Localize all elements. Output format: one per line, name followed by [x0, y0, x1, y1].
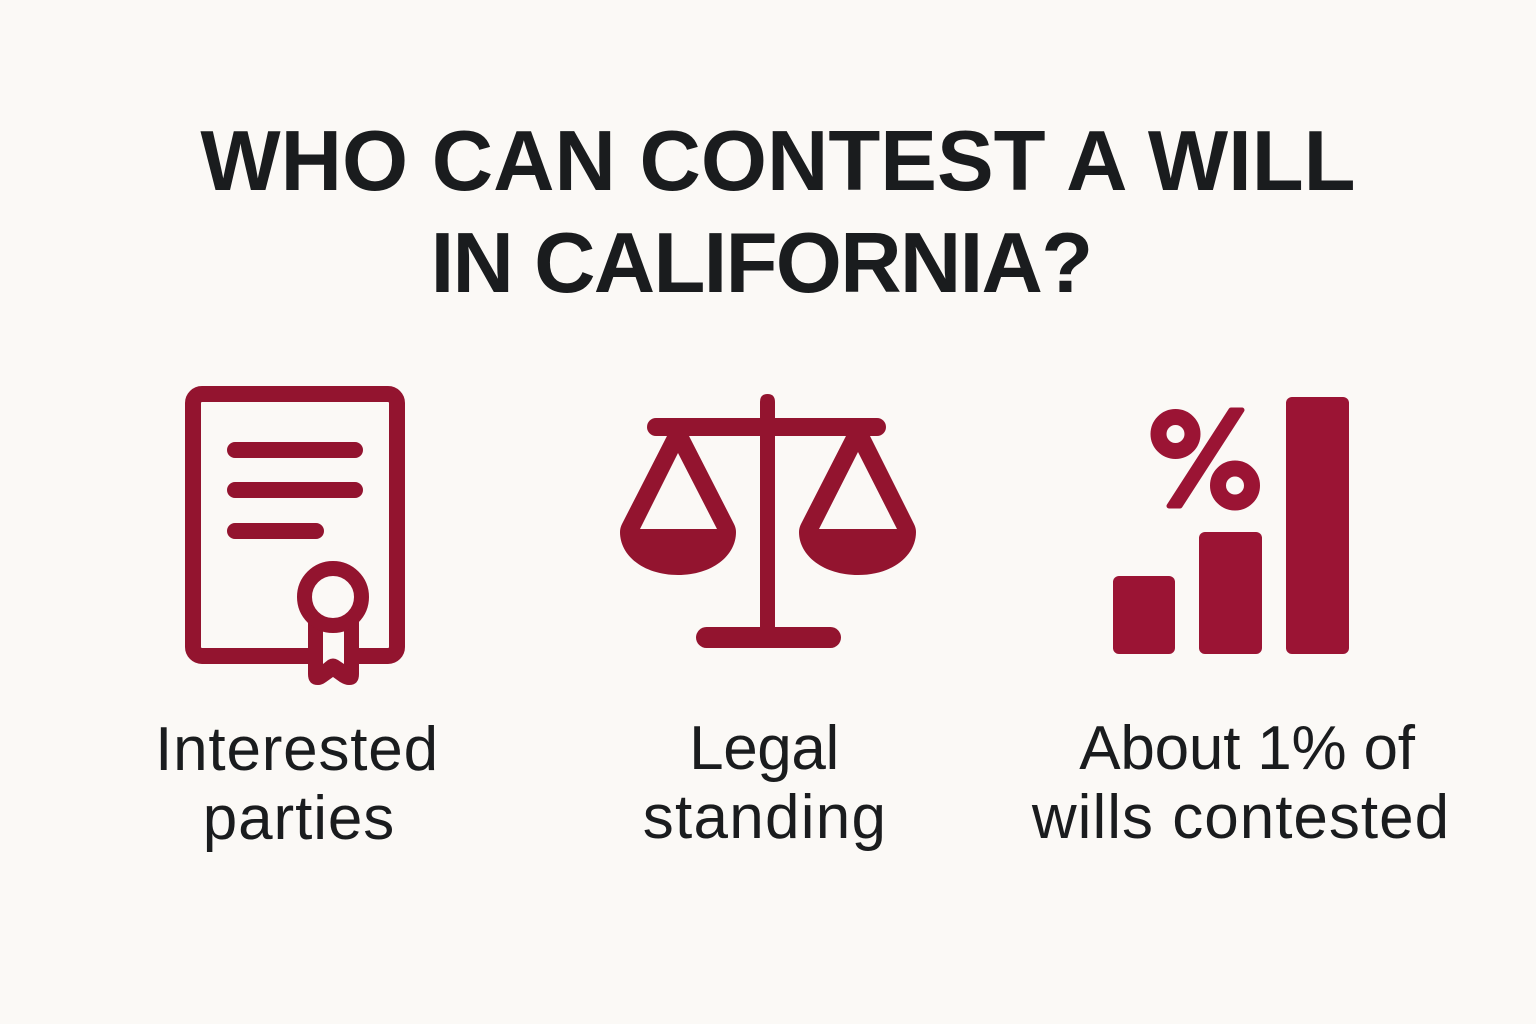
icon: percent and bar chart [1113, 397, 1349, 654]
icon: document with seal [193, 394, 397, 685]
label: about 1% of wills contested [1032, 714, 1450, 852]
title: IN CALIFORNIA? [431, 216, 1091, 311]
label: legal standing: standing [643, 783, 887, 852]
label: legal standing [643, 714, 887, 852]
label: interested parties [155, 715, 439, 853]
label: interested parties: Interested [155, 715, 439, 784]
label: about 1% of wills contested: wills contested [1032, 783, 1450, 852]
label: about 1% of wills contested: About 1% of [1079, 714, 1415, 783]
title: WHO CAN CONTEST A WILL [200, 114, 1356, 209]
label: interested parties: parties [203, 784, 395, 853]
title [200, 114, 1356, 311]
icon: balance scales [620, 394, 916, 648]
label: legal standing: Legal [689, 714, 839, 783]
